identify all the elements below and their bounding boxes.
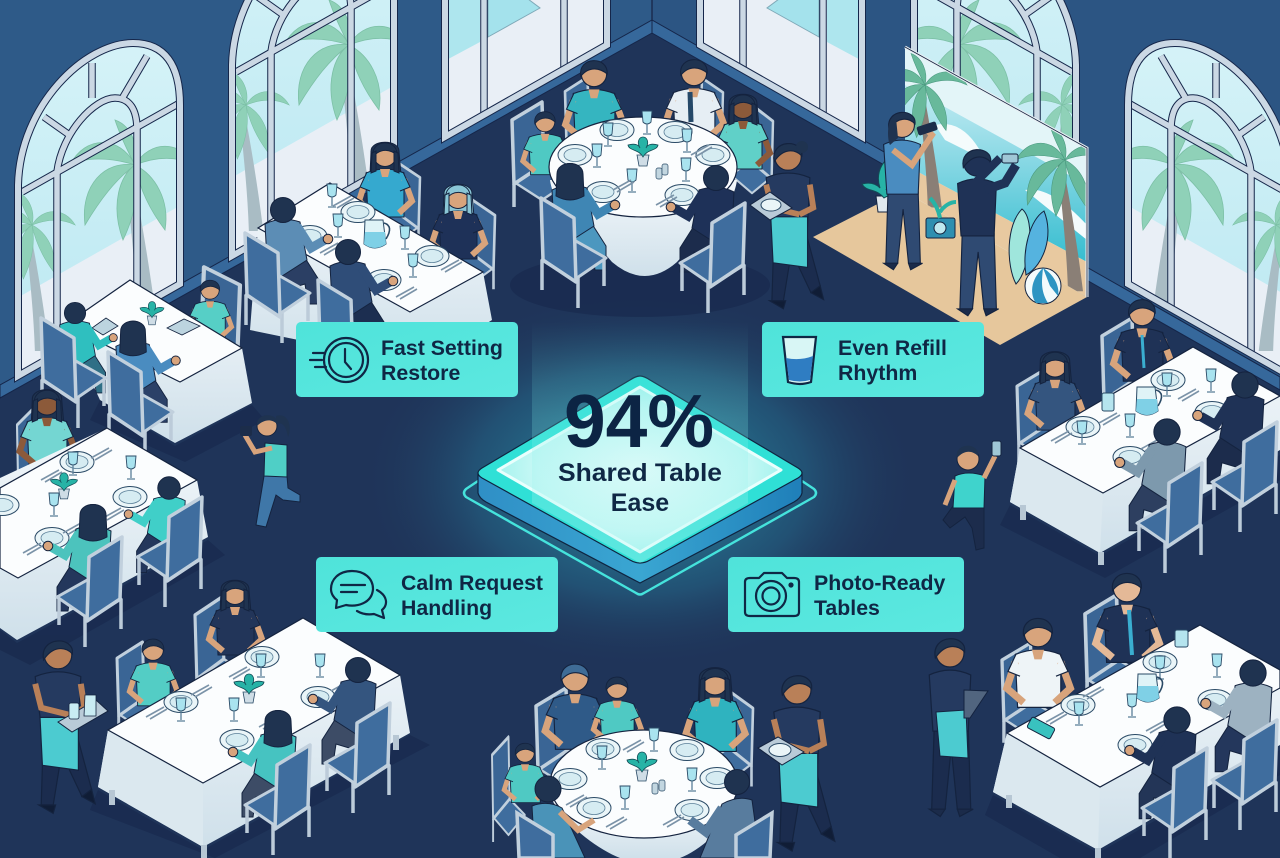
window: right 5 [899,0,1109,300]
callout text: Handling [401,596,492,620]
diner: man from behind [690,770,760,858]
running boy [943,441,1001,550]
icon: clock [310,338,368,382]
table group: left upper (tablets) [41,267,252,462]
callout text: Fast Setting [381,336,503,360]
table group: bottom left [98,580,410,858]
callout text: Rhythm [838,361,917,385]
callout text: Calm Request [401,571,543,595]
window: left 1 [0,30,195,420]
table group: right top [1010,300,1280,573]
floor shadows [0,253,1280,858]
window: left 2 [199,0,409,300]
table group: right bottom [993,573,1280,858]
center glow [360,290,920,670]
camera box with plant [926,198,956,238]
platform top face [478,376,802,563]
inner light panel [498,387,781,552]
callout: Calm Request Handling [316,557,558,632]
value: 94% [564,379,714,463]
label: Shared Table [558,459,722,487]
photo backdrop [813,40,1110,345]
waitress with tablet [929,639,988,816]
surfboards [1009,209,1030,284]
table group: top left [245,142,495,390]
chair front left [517,813,553,858]
waiter: left [35,641,108,813]
window: right 4 [690,0,870,151]
round table: top [512,60,773,313]
callout text: Restore [381,361,460,385]
running girl [240,415,300,527]
waiter: bottom [758,676,835,851]
sand mat [813,190,1087,345]
beach ball [1025,268,1061,304]
window: right 6 [1113,30,1280,420]
chair front right [736,813,772,858]
round table: bottom [492,664,772,858]
waiter: top [750,141,824,309]
icon: chat bubbles [331,571,386,618]
diner: woman from behind [532,776,594,858]
windows [0,0,1280,420]
callout text: Even Refill [838,336,947,360]
central metric badge [464,322,816,594]
icon: camera [745,573,799,616]
central metric badge: Ease [611,489,669,517]
light beam [532,322,748,563]
window: left 3 [437,0,617,151]
callout text: Photo-Ready [814,571,945,595]
outer ring [464,481,816,594]
icon: water glass [783,337,816,384]
callout: Photo-Ready Tables [728,557,964,632]
callout text: Tables [814,596,880,620]
back walls [0,0,1280,398]
table group: left middle [0,390,208,647]
platform side [478,473,802,583]
callout: Fast Setting Restore [296,322,518,397]
photographer woman [884,112,938,270]
callout: Even Refill Rhythm [762,322,984,397]
plant pot [862,160,902,212]
photographer man [958,150,1018,316]
